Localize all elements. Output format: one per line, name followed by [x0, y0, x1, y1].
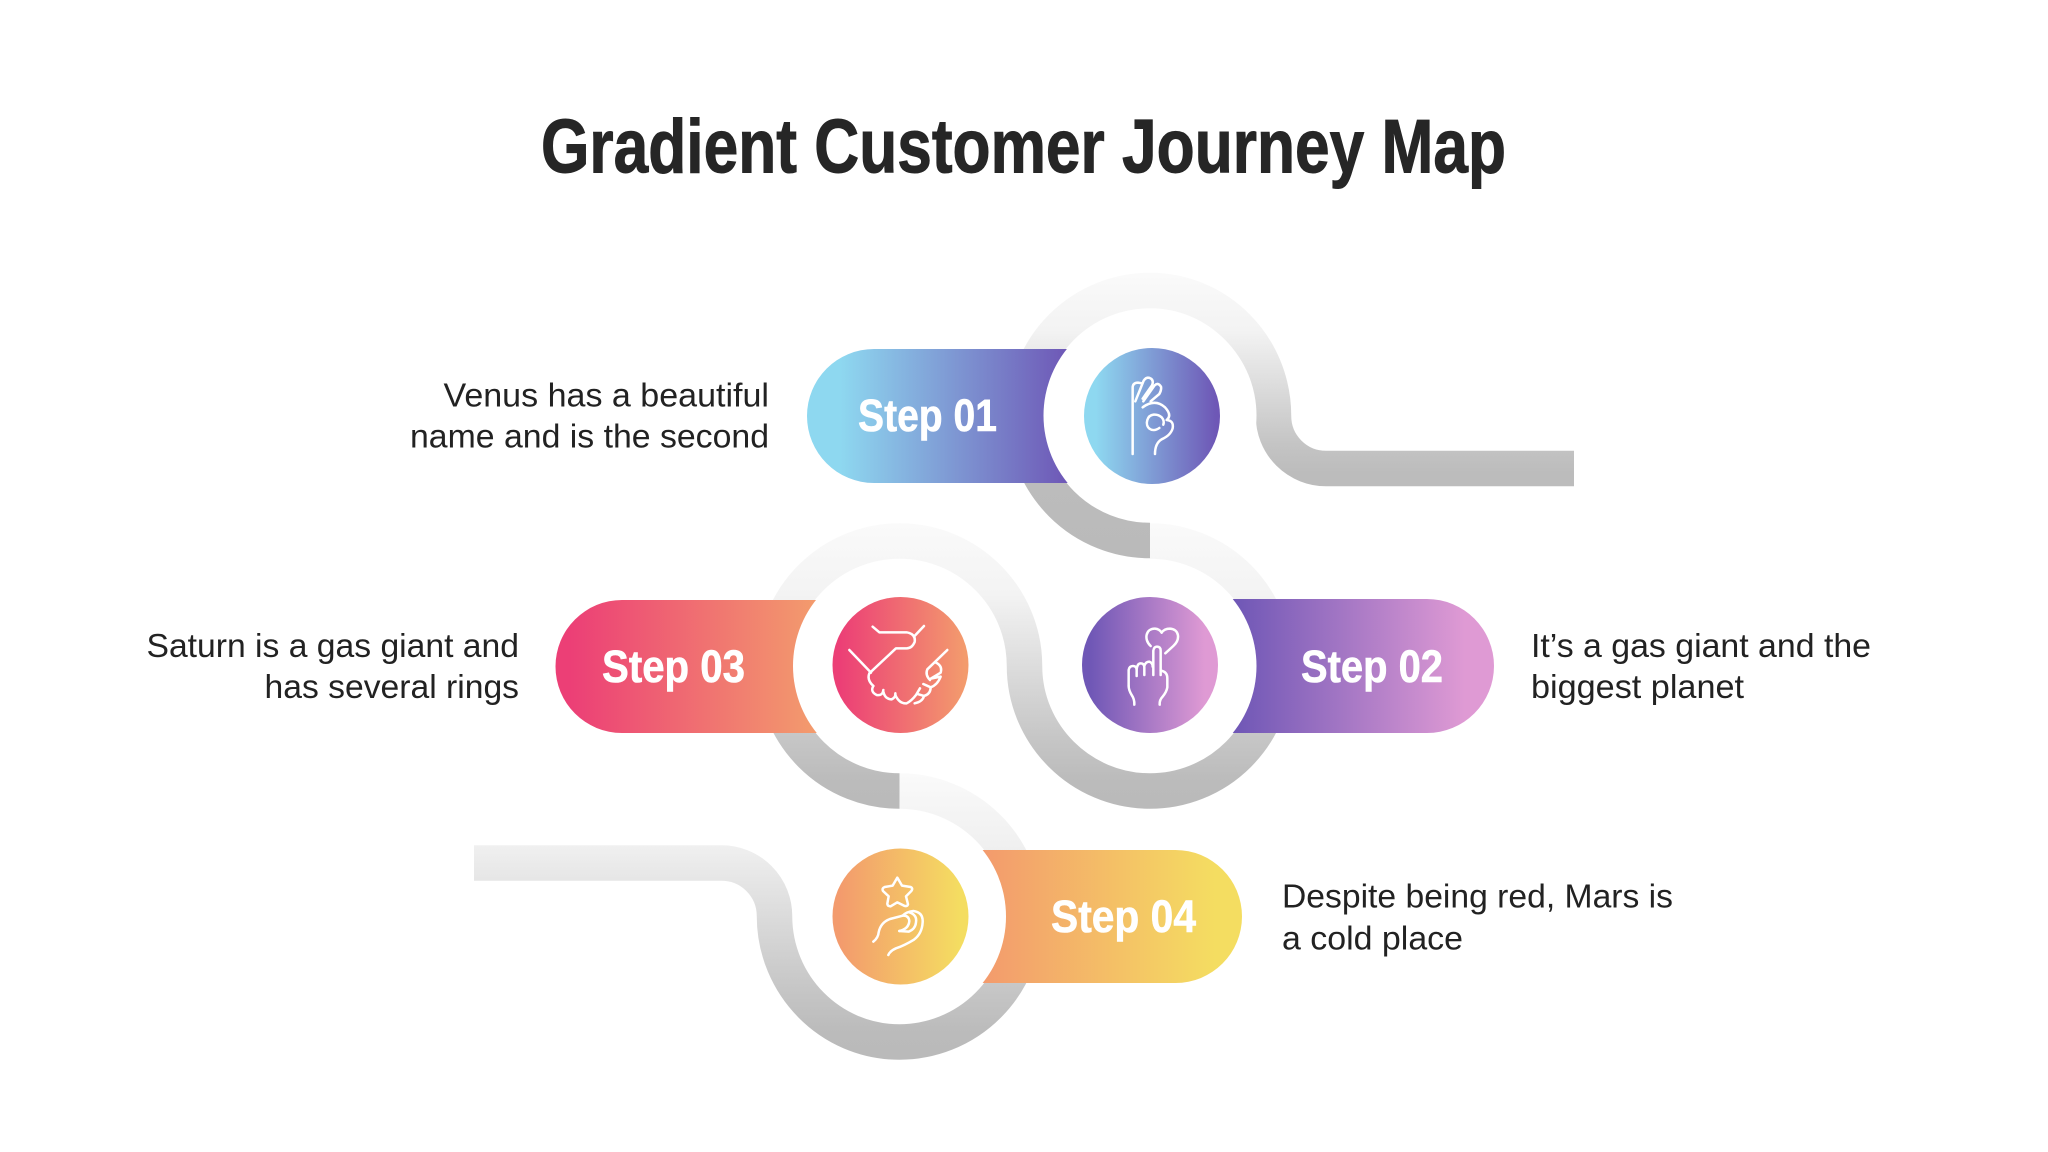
description: step 03 [146, 627, 519, 705]
label: step 03: Step 03 [602, 641, 745, 692]
white ring: step 01 [1044, 309, 1256, 522]
label: step 01: Step 01 [858, 390, 997, 441]
description: step 02 [1531, 627, 1871, 705]
description: step 04: Despite being red, Mars is [1282, 878, 1673, 915]
white ring: step 03 [793, 560, 1006, 772]
description: step 03: Saturn is a gas giant and [146, 627, 519, 664]
circle: step 04 [832, 848, 968, 984]
pill: step 04 [901, 850, 1242, 983]
icon: handshake [849, 626, 947, 703]
description: step 01 [410, 377, 769, 455]
icon: hand holding star [873, 878, 923, 955]
circle: step 03 [832, 597, 968, 733]
description: step 03: has several rings [264, 668, 519, 705]
description: step 04: a cold place [1282, 920, 1463, 956]
label: step 02: Step 02 [1301, 641, 1443, 692]
description: step 01: Venus has a beautiful [444, 377, 769, 414]
white ring: step 04 [793, 810, 1006, 1023]
description: step 01: name and is the second [410, 418, 769, 455]
title: Gradient Customer Journey Map [541, 104, 1506, 190]
winding grey path [474, 290, 1574, 1042]
pill: step 01 [807, 349, 1152, 483]
panel: step 03 [146, 560, 1006, 772]
panel: step 02 [1044, 560, 1871, 772]
panel: step 04 [793, 810, 1673, 1023]
circle: step 02 [1082, 597, 1218, 733]
description: step 04 [1282, 878, 1673, 956]
label: step 04: Step 04 [1051, 891, 1196, 942]
description: step 02: biggest planet [1531, 668, 1744, 705]
white ring: step 02 [1044, 560, 1256, 772]
icon: ok hand gesture [1133, 378, 1173, 454]
pill: step 03 [556, 600, 900, 733]
description: step 02: It’s a gas giant and the [1531, 627, 1871, 664]
circle: step 01 [1084, 348, 1220, 484]
panel: step 01 [410, 309, 1256, 522]
pill: step 02 [1150, 599, 1494, 733]
icon: finger touching heart [1129, 629, 1178, 705]
